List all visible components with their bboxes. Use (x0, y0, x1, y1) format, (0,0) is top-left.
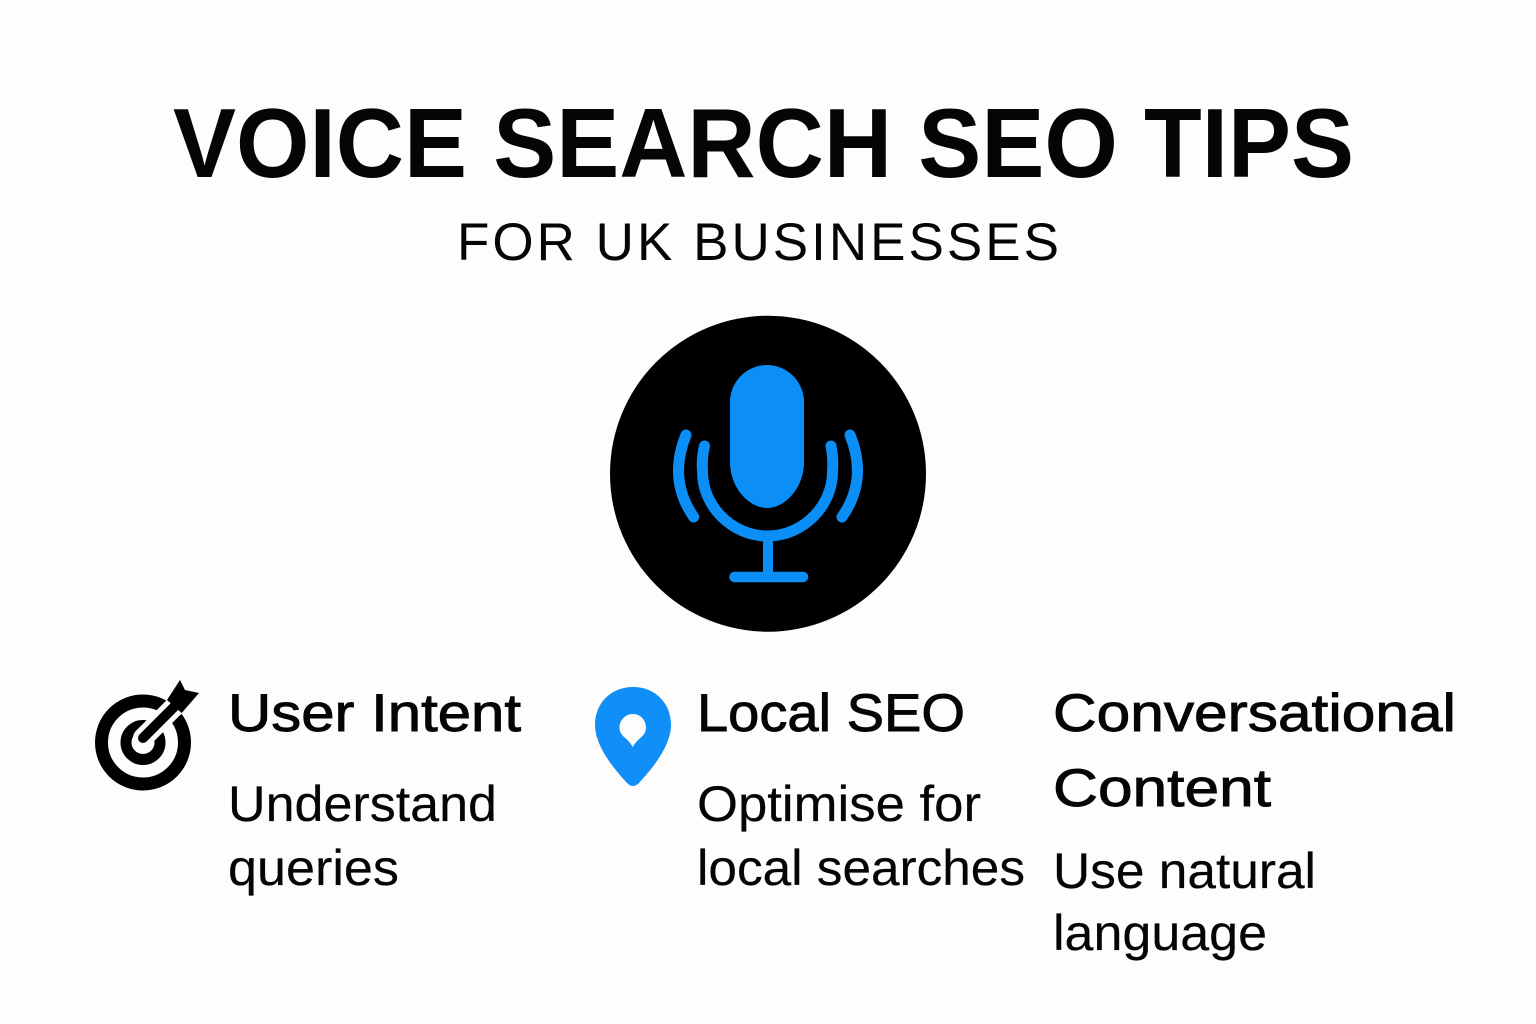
panel: user intent (102, 680, 521, 896)
text: understand queries: Understand (228, 776, 497, 832)
panel: local seo (595, 684, 1025, 896)
icon: microphone in black circle (610, 316, 926, 632)
text: understand queries: queries (228, 840, 399, 896)
heading: conversational content: Conversational (1053, 684, 1456, 743)
text: optimise for local searches: Optimise for (697, 776, 981, 832)
icon: location pin (595, 687, 671, 786)
heading: local seo: Local SEO (697, 684, 965, 743)
text: use natural language: Use natural (1053, 843, 1316, 899)
heading: user intent: User Intent (228, 684, 521, 743)
text: use natural language: language (1053, 905, 1267, 961)
panel: conversational content (1053, 684, 1456, 961)
subtitle: FOR UK BUSINESSES (457, 213, 1059, 272)
text: optimise for local searches: local searches (697, 840, 1025, 896)
icon: target with arrow (102, 680, 199, 784)
heading: conversational content: Content (1053, 759, 1271, 818)
title: VOICE SEARCH SEO TIPS (173, 88, 1354, 198)
